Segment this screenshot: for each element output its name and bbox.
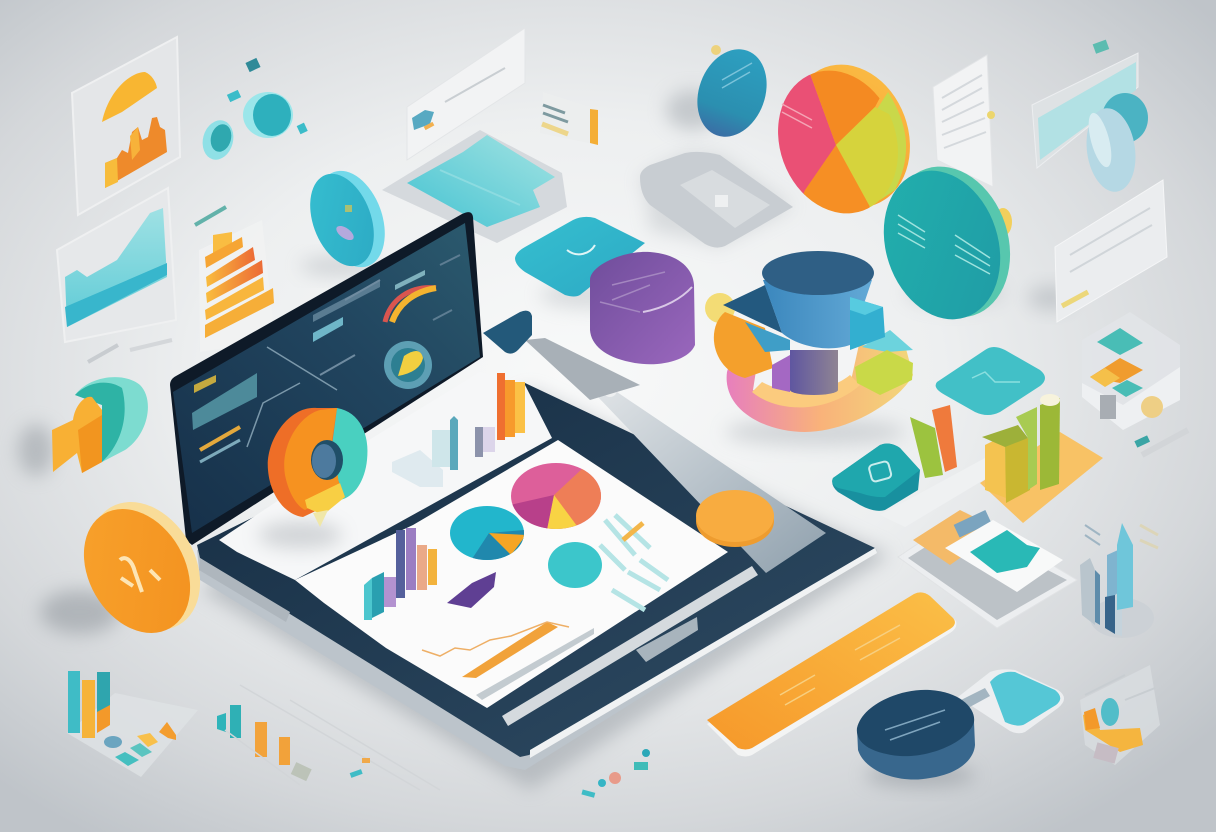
panel: right paper stack: [933, 55, 995, 187]
chart: purple bar chart: [364, 528, 437, 620]
panel: orange strip: [707, 592, 956, 756]
chart: pink pie: [511, 463, 601, 529]
chart: teal pie: [450, 506, 526, 562]
panel: top-left chart card: [72, 37, 180, 215]
panel: bottom-right mini cards: [1080, 665, 1160, 765]
icon: blue disc: [666, 39, 778, 147]
icon: teal tile: [515, 217, 645, 309]
chart: yellow-green 3D bars: [980, 394, 1103, 523]
panel: silver device: [640, 152, 793, 248]
panel: main report paper: [295, 440, 728, 708]
chart: orange line chart: [422, 622, 594, 700]
chart: back paper bars: [392, 373, 525, 487]
panel: right document card: [1028, 180, 1167, 322]
panel: layered card stack: [898, 510, 1077, 628]
panel: laptop screen: [170, 212, 483, 545]
icon: teal check tile: [832, 444, 920, 511]
icon: centre 3D stack: [705, 251, 913, 446]
panel: back white paper: [219, 372, 552, 580]
chart: bottom-left bars: [67, 671, 198, 777]
chart: orange stacked pyramid: [195, 207, 275, 352]
chart: blue towers: [1080, 523, 1158, 638]
icon: navy tile and grey slab: [483, 311, 640, 400]
icon: purple cylinder: [590, 252, 695, 364]
panel: small note card: [540, 92, 598, 145]
chart: big teal disc: [865, 151, 1029, 335]
icon: orange tile on laptop: [696, 490, 774, 547]
chart: large pie disc: [778, 64, 910, 214]
chart: teal mini bars right: [600, 515, 668, 610]
icon: isometric orange-teal box: [1082, 312, 1188, 455]
icon: navy cylinder: [857, 690, 975, 787]
chart: bottom-centre bars: [217, 685, 440, 790]
icon: left pencil marks: [88, 340, 172, 362]
chart: green and orange bars: [910, 405, 957, 478]
chart: bottom-centre tiny dashes: [581, 749, 650, 798]
icon: teal ellipse: [548, 542, 602, 588]
icon: 3D donut: [268, 408, 368, 527]
panel: laptop base: [197, 383, 890, 790]
icon: orange coin: [40, 482, 222, 652]
panel: top-centre document: [407, 28, 525, 160]
panel: teal rounded card: [958, 669, 1064, 733]
screen dashboard widgets: [192, 255, 460, 462]
panel: white tray under bars: [880, 458, 992, 527]
panel: top-right card with glass cylinder: [1032, 40, 1148, 195]
icon: teal tile right: [936, 347, 1045, 415]
panel: area chart card: [57, 188, 176, 342]
icon: purple wedge: [447, 572, 496, 608]
panel: teal glass tablet: [382, 130, 567, 243]
icon: teal disc: [298, 161, 397, 277]
icon: grey hinge bar: [636, 617, 698, 662]
icon: orange-teal arch: [18, 377, 148, 476]
icons: small teal circles: [198, 58, 308, 163]
